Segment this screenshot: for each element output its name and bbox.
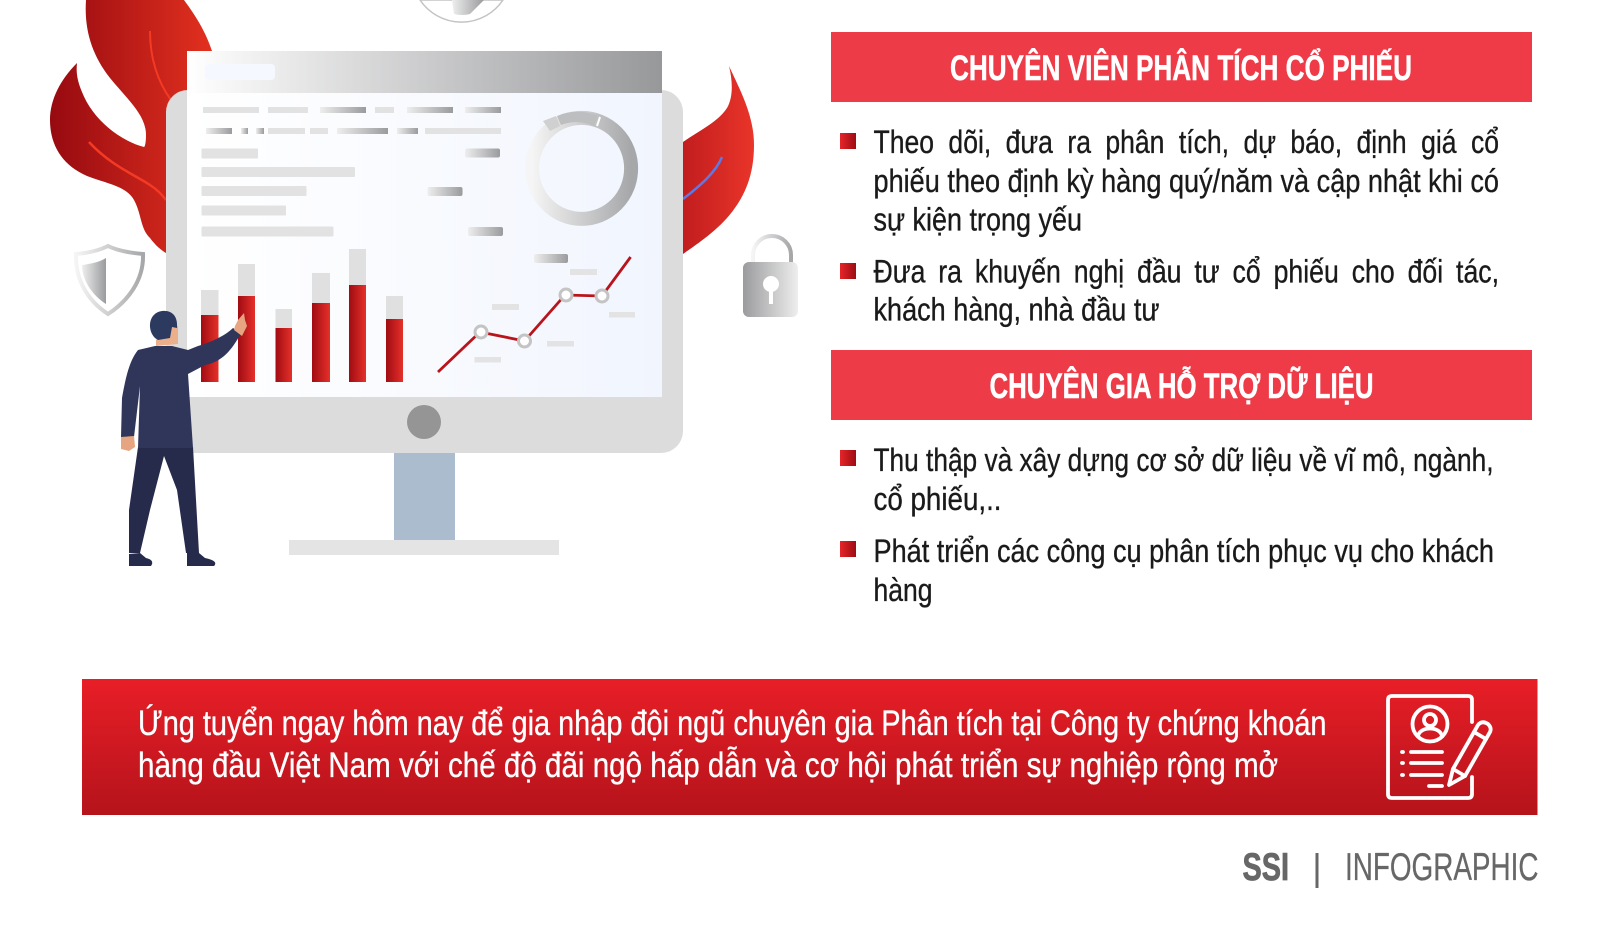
monitor bbox=[166, 51, 683, 555]
bullet list: data support duties bbox=[840, 442, 1494, 608]
line chart bbox=[438, 257, 635, 372]
bullet list: data support duties: cổ phiếu,.. bbox=[874, 481, 1002, 517]
footer: SSI | INFOGRAPHIC: SSI bbox=[1242, 846, 1289, 889]
heading: data support specialist: CHUYÊN GIA HỖ TRỢ DỮ LIỆU bbox=[990, 366, 1374, 406]
screen table rows bbox=[202, 107, 568, 263]
bullet list: data support duties: Phát triển các công cụ phân tích phục vụ cho khách bbox=[874, 533, 1494, 569]
bullet list: stock analyst duties: khách hàng, nhà đầu tư bbox=[874, 292, 1160, 328]
heading: stock analyst bbox=[831, 32, 1532, 102]
right flame bbox=[660, 66, 754, 254]
bullet list: data support duties: hàng bbox=[874, 572, 932, 608]
callout text bbox=[138, 704, 1326, 785]
donut chart bbox=[532, 112, 631, 219]
icon: application form and pencil bbox=[1388, 696, 1491, 798]
footer: SSI | INFOGRAPHIC bbox=[1242, 846, 1538, 889]
icon: shield bbox=[76, 246, 143, 314]
icon: padlock bbox=[743, 236, 798, 317]
left flame bbox=[50, 0, 212, 253]
illustration: analyst at monitor bbox=[50, 0, 798, 566]
bullet list: stock analyst duties bbox=[840, 124, 1499, 328]
callout text: Ứng tuyển ngay hôm nay để gia nhập đội ngũ chuyên gia Phân tích tại Công ty chứng khoán bbox=[138, 704, 1326, 743]
heading: data support specialist bbox=[831, 350, 1532, 420]
callout banner bbox=[82, 679, 1538, 815]
icon: top gauge fragment bbox=[420, 0, 503, 22]
panel: data support specialist bbox=[831, 350, 1532, 608]
callout text: hàng đầu Việt Nam với chế độ đãi ngộ hấp dẫn và cơ hội phát triển sự nghiệp rộng mở bbox=[138, 746, 1278, 785]
panel: stock analyst bbox=[831, 32, 1532, 328]
bullet list: stock analyst duties: sự kiện trọng yếu bbox=[874, 202, 1082, 238]
heading: stock analyst: CHUYÊN VIÊN PHÂN TÍCH CỔ PHIẾU bbox=[950, 48, 1412, 88]
person pointing at chart bbox=[121, 311, 247, 566]
bar chart bbox=[201, 249, 403, 382]
bullet list: stock analyst duties: phiếu theo định kỳ hàng quý/năm và cập nhật khi có bbox=[874, 163, 1499, 199]
